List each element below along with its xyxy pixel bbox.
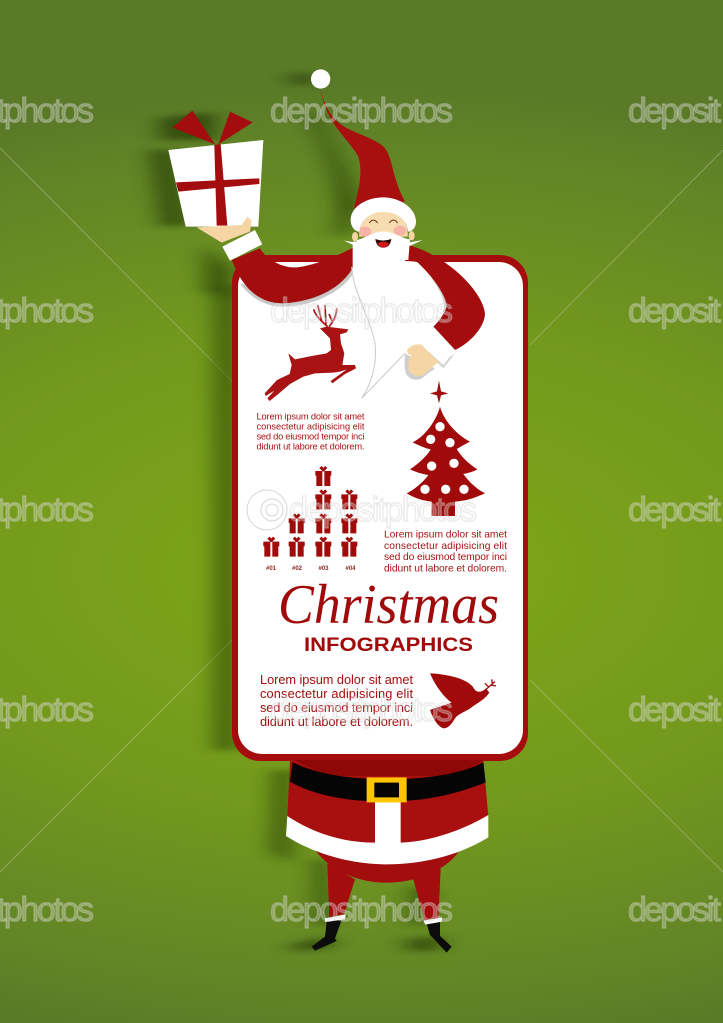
chart labels: #01 bbox=[266, 566, 277, 572]
skin bbox=[359, 211, 408, 237]
hat bbox=[311, 69, 405, 208]
text block 2 bbox=[384, 530, 507, 574]
text block 1: didunt ut labore et dolorem. bbox=[256, 442, 364, 452]
watermarks: depositphotos bbox=[270, 292, 453, 330]
santa face bbox=[344, 197, 423, 260]
cast shadows bbox=[150, 73, 440, 952]
watermarks: depositphotos bbox=[289, 491, 477, 529]
icon: gift held up bbox=[168, 111, 263, 227]
watermarks: deposit bbox=[628, 92, 722, 130]
legs bbox=[327, 863, 441, 922]
chart: gift pictogram columns bbox=[263, 466, 357, 557]
jacket bbox=[287, 760, 488, 847]
chart labels: #04 bbox=[345, 566, 356, 572]
star bbox=[430, 381, 448, 403]
chart labels: #02 bbox=[292, 566, 303, 572]
panel: infographic card bbox=[232, 255, 528, 761]
moustache and beard top bbox=[357, 232, 410, 260]
right hand bbox=[405, 344, 438, 380]
icon: dove bbox=[430, 673, 496, 728]
tree body bbox=[407, 407, 485, 516]
text block 1 bbox=[256, 412, 365, 452]
coat white trim bbox=[286, 802, 488, 864]
text block 2: didunt ut labore et dolorem. bbox=[384, 564, 507, 574]
beard bbox=[352, 242, 447, 398]
santa upper body bbox=[168, 69, 485, 401]
watermarks: deposit bbox=[628, 691, 722, 729]
hat brim bbox=[351, 197, 416, 232]
text block 1: consectetur adipisicing elit bbox=[256, 422, 365, 432]
santa lower body bbox=[286, 760, 488, 953]
icon: christmas tree bbox=[407, 381, 485, 516]
watermarks: deposit bbox=[628, 891, 722, 929]
text block 2: Lorem ipsum dolor sit amet bbox=[384, 530, 507, 540]
ears bbox=[352, 231, 415, 241]
text block 2: consectetur adipisicing elit bbox=[384, 541, 507, 552]
boots bbox=[312, 920, 452, 953]
boot cuffs bbox=[325, 914, 442, 925]
belly bbox=[315, 850, 460, 883]
text block 3: consectetur adipisicing elit bbox=[260, 686, 413, 701]
watermarks: deposit bbox=[628, 491, 722, 529]
text block 1: sed do eiusmod tempor inci bbox=[256, 432, 364, 442]
text block 2: sed do eiusmod tempor inci bbox=[384, 552, 507, 563]
cheeks bbox=[359, 226, 406, 237]
mouth bbox=[375, 239, 391, 248]
watermarks: depositphotos bbox=[270, 92, 453, 130]
text block 3: Lorem ipsum dolor sit amet bbox=[260, 672, 413, 687]
whiskers bbox=[344, 240, 423, 247]
watermarks: depositphotos bbox=[270, 891, 453, 929]
jacket shoulder under card bbox=[295, 760, 483, 776]
eyes bbox=[369, 220, 398, 223]
left arm bbox=[240, 267, 353, 307]
title: Christmas bbox=[278, 574, 499, 636]
text block 1: Lorem ipsum dolor sit amet bbox=[256, 412, 365, 422]
right cuff bbox=[420, 346, 455, 368]
diagonal light lines bbox=[0, 148, 723, 872]
chart labels bbox=[266, 566, 356, 572]
text block 3: sed do eiusmod tempor inci bbox=[260, 700, 413, 715]
chart labels: #03 bbox=[318, 566, 329, 572]
watermarks: deposit bbox=[628, 292, 722, 330]
ornaments bbox=[420, 422, 469, 494]
belt bbox=[290, 762, 486, 802]
watermarks: depositphotos bbox=[270, 691, 453, 729]
text block 3: didunt ut labore et dolorem. bbox=[260, 714, 413, 729]
left cuff bbox=[222, 230, 262, 261]
belt buckle bbox=[367, 777, 407, 802]
subtitle: INFOGRAPHICS bbox=[304, 634, 473, 656]
icon: reindeer bbox=[265, 305, 356, 401]
right arm bbox=[405, 245, 485, 350]
left hand bbox=[197, 217, 252, 243]
text block 3 bbox=[260, 672, 413, 729]
